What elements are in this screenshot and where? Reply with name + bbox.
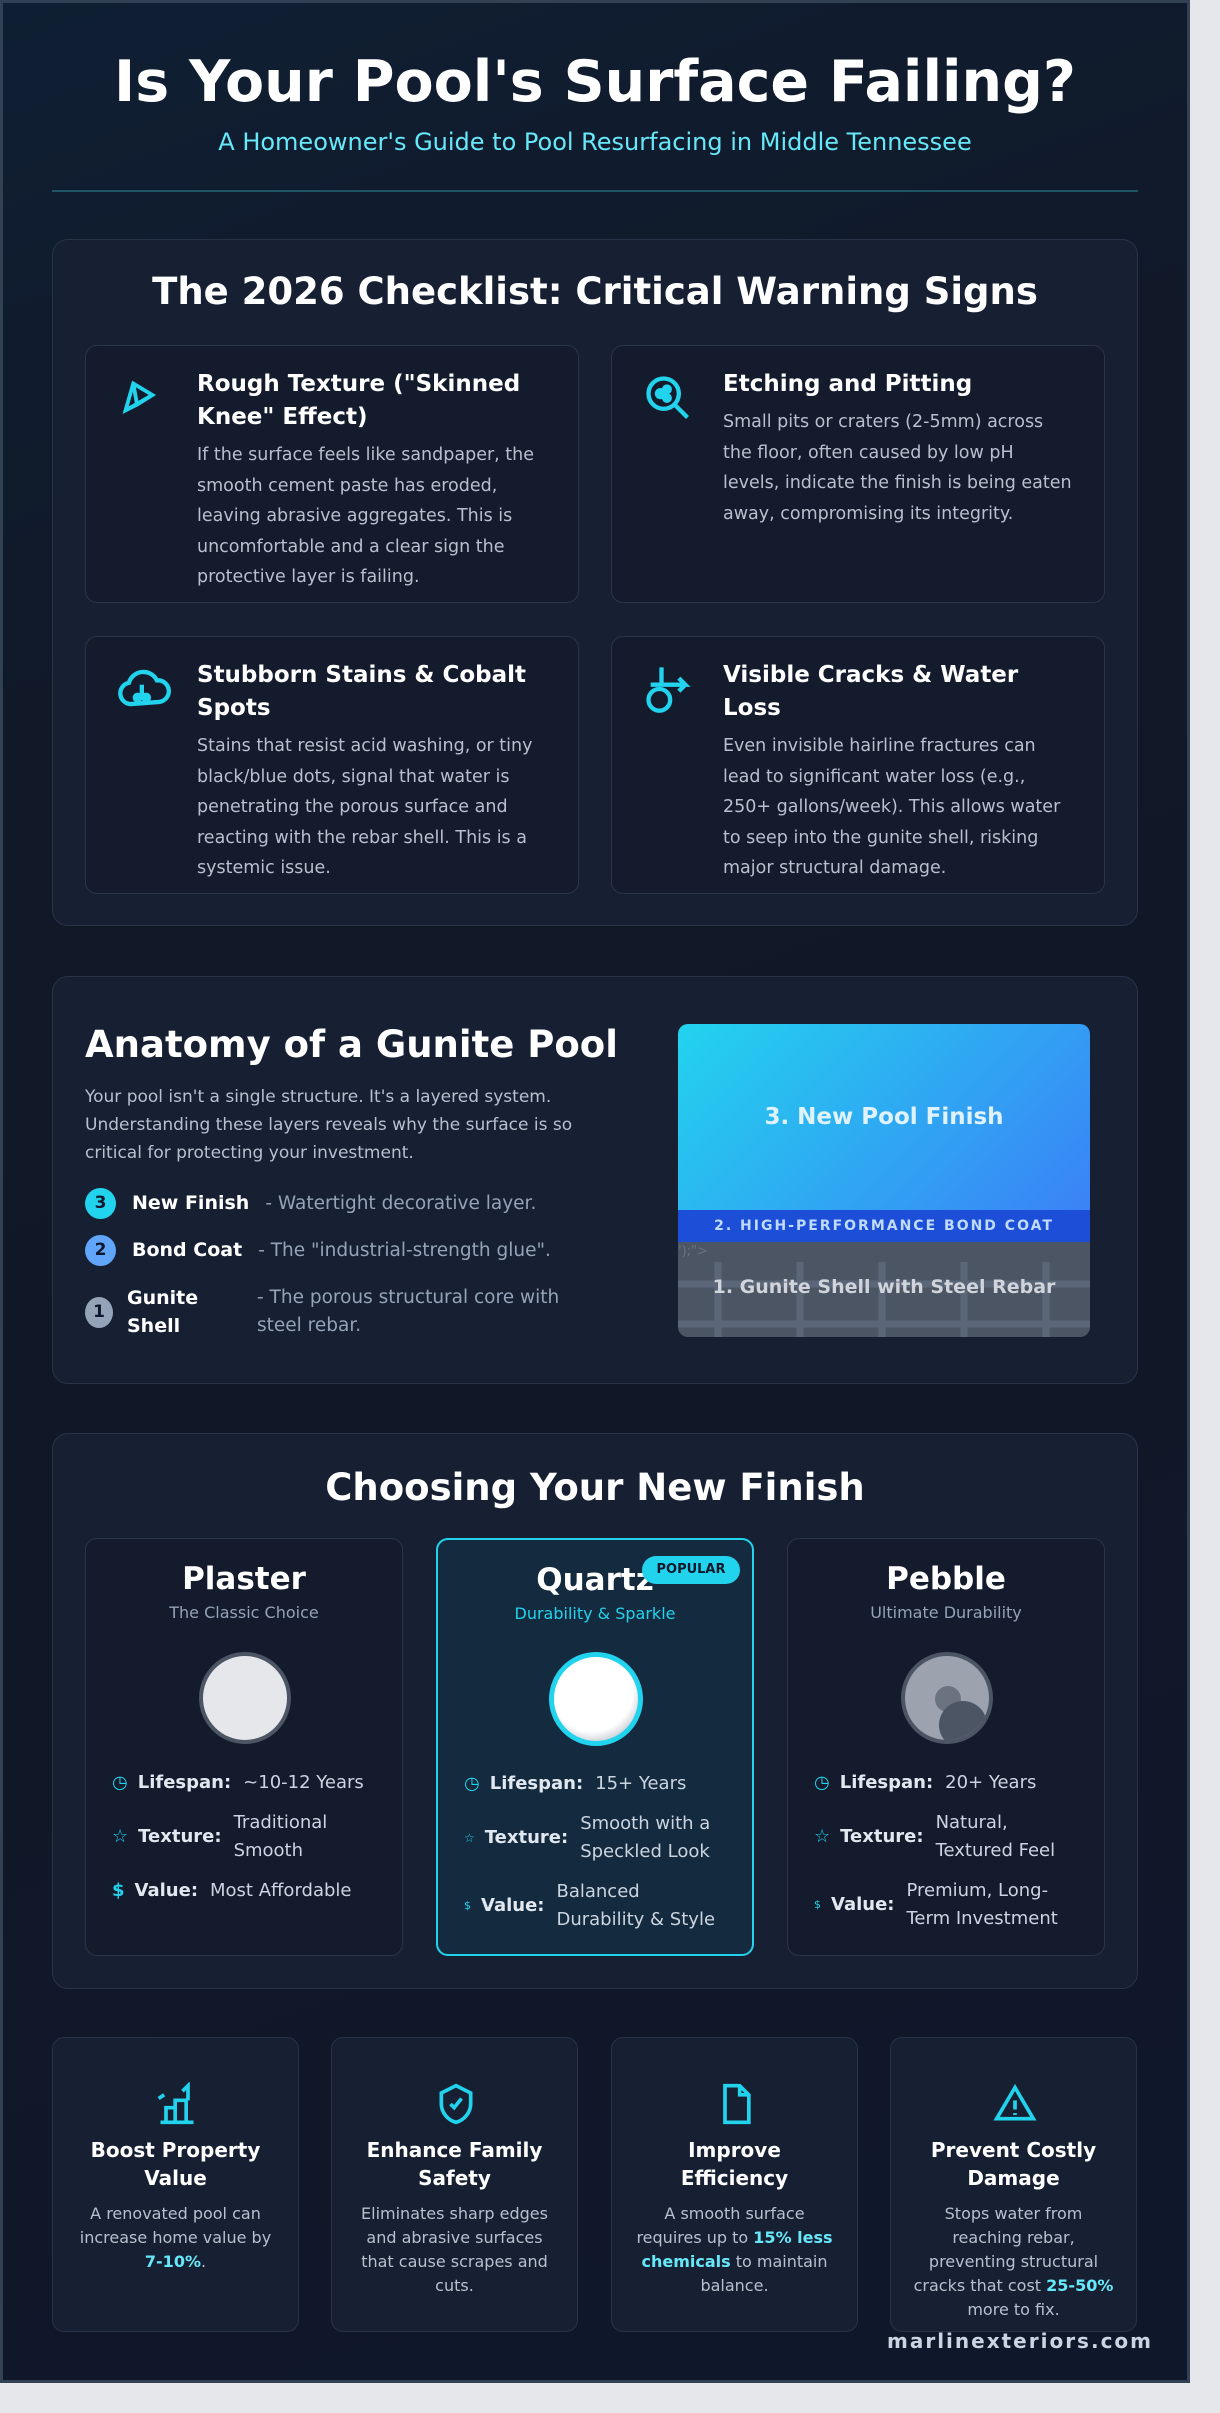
icon: crack <box>646 667 690 713</box>
card: stains: Stains that resist acid washing, or tiny black/blue dots, signal that water is penetrating the porous surface and reacting with the rebar shell. This is a systemic issue. <box>197 736 532 878</box>
swatch: quartz <box>549 1652 643 1746</box>
layer: new finish <box>678 1024 1090 1210</box>
benefit: prevent damage: Stops water from reaching rebar, preventing structural cracks that cost 25-50% more to fix. <box>914 2204 1113 2319</box>
panel: choosing finish <box>52 1433 1138 1989</box>
card: quartz: Texture: <box>485 1827 568 1848</box>
card: stains: Stubborn Stains & Cobalt Spots <box>197 662 526 721</box>
card: pebble: 20+ Years <box>945 1772 1036 1793</box>
card: plaster: Lifespan: <box>138 1772 231 1793</box>
card: cracks: Even invisible hairline fractures can lead to significant water loss (e.g., 250+ gallons/week). This allows water to seep into the gunite shell, risking major structural damage. <box>723 736 1060 878</box>
card: plaster: ~10-12 Years <box>243 1772 364 1793</box>
badge: popular: POPULAR <box>656 1562 726 1577</box>
layer: new finish: 3. New Pool Finish <box>764 1104 1004 1130</box>
card: quartz: Smooth with a Speckled Look <box>580 1813 710 1862</box>
card: pebble: ☆ <box>814 1826 830 1847</box>
card: pebble: Ultimate Durability <box>870 1603 1022 1622</box>
layer: gunite shell <box>678 1242 1090 1337</box>
card: pebble: $ <box>814 1898 821 1911</box>
swatch: plaster <box>199 1652 291 1744</box>
layer: bond coat: 2. HIGH-PERFORMANCE BOND COAT <box>714 1218 1054 1234</box>
badge: popular <box>642 1556 740 1584</box>
card: rough texture: If the surface feels like sandpaper, the smooth cement paste has eroded, leaving abrasive aggregates. This is uncomfortable and a clear sign the protective layer is failing. <box>197 445 534 587</box>
layer: gunite shell: ');"> <box>678 1244 708 1259</box>
benefit: efficiency <box>611 2037 858 2332</box>
card: pebble: Texture: <box>840 1826 924 1847</box>
item 2: Bond Coat <box>132 1239 242 1261</box>
item 3: 3 <box>95 1193 106 1213</box>
card: pebble: Lifespan: <box>840 1772 933 1793</box>
icon: magnifier <box>646 376 689 419</box>
card: cracks: Visible Cracks & Water Loss <box>723 662 1018 721</box>
layer: bond coat <box>678 1210 1090 1242</box>
panel: warning signs checklist <box>52 239 1138 926</box>
benefit: property value: Boost Property Value <box>91 2138 260 2190</box>
checklist heading: The 2026 Checklist: Critical Warning Signs <box>152 270 1038 313</box>
benefit: property value: A renovated pool can increase home value by 7-10%. <box>80 2204 271 2271</box>
panel: anatomy <box>52 976 1138 1384</box>
card: stains <box>85 636 579 894</box>
benefit: efficiency: A smooth surface requires up to 15% less chemicals to maintain balance. <box>636 2204 833 2295</box>
finish heading: Choosing Your New Finish <box>325 1466 865 1509</box>
card: plaster: ◷ <box>112 1772 128 1793</box>
card: quartz: ◷ <box>464 1773 480 1794</box>
icon: cloud <box>118 670 171 706</box>
card: pebble <box>787 1538 1105 1956</box>
item 1: Gunite Shell <box>127 1287 198 1337</box>
card: plaster: Texture: <box>138 1826 222 1847</box>
card: plaster: ☆ <box>112 1826 128 1847</box>
anatomy heading: Anatomy of a Gunite Pool <box>85 1023 618 1066</box>
diagram: pool layers <box>678 1024 1090 1337</box>
item 1: - The porous structural core with steel rebar. <box>257 1287 559 1336</box>
benefit: property value <box>52 2037 299 2332</box>
card: pebble: ◷ <box>814 1772 830 1793</box>
title: Is Your Pool's Surface Failing? <box>114 49 1076 115</box>
icon: building <box>158 2082 194 2124</box>
card: plaster: $ <box>112 1880 125 1901</box>
card: quartz <box>436 1538 754 1956</box>
card: cracks <box>611 636 1105 894</box>
card: pebble: Premium, Long-Term Investment <box>906 1880 1058 1929</box>
item 1: 1 <box>93 1302 105 1322</box>
subtitle: A Homeowner's Guide to Pool Resurfacing in Middle Tennessee <box>218 128 972 156</box>
benefit: prevent damage <box>890 2037 1137 2332</box>
card: pebble: Value: <box>831 1894 894 1915</box>
icon: document <box>723 2084 751 2124</box>
benefit: prevent damage: Prevent Costly Damage <box>931 2138 1096 2190</box>
card: quartz: Lifespan: <box>490 1773 583 1794</box>
benefit: efficiency: Improve Efficiency <box>681 2138 788 2190</box>
item 2: - The "industrial-strength glue". <box>258 1240 551 1260</box>
benefit: safety: Enhance Family Safety <box>367 2138 542 2190</box>
card: quartz: Value: <box>481 1895 544 1916</box>
layer list <box>85 1188 559 1337</box>
card: rough texture <box>85 345 579 603</box>
item 2: 2 <box>95 1240 106 1260</box>
card: plaster: Plaster <box>182 1561 306 1597</box>
card: plaster: The Classic Choice <box>169 1603 319 1622</box>
card: pebble: Pebble <box>886 1561 1006 1597</box>
card: plaster: Traditional Smooth <box>234 1812 327 1861</box>
card: pebble: Natural, Textured Feel <box>936 1812 1055 1861</box>
icon: warning <box>994 2084 1036 2120</box>
card: plaster: Most Affordable <box>210 1880 351 1901</box>
icon: rough <box>122 380 156 414</box>
card: quartz: ☆ <box>464 1831 475 1845</box>
card: etching: Etching and Pitting <box>723 371 972 397</box>
card: quartz: $ <box>464 1899 471 1912</box>
item 3 <box>85 1188 536 1219</box>
card: etching <box>611 345 1105 603</box>
card: plaster: Value: <box>135 1880 198 1901</box>
swatch: pebble <box>901 1652 993 1744</box>
benefit: safety <box>331 2037 578 2332</box>
icon: shield <box>440 2084 472 2124</box>
card: quartz: Durability & Sparkle <box>514 1604 675 1623</box>
benefit: safety: Eliminates sharp edges and abrasive surfaces that cause scrapes and cuts. <box>361 2204 548 2295</box>
card: plaster <box>85 1538 403 1956</box>
card: etching: Small pits or craters (2-5mm) across the floor, often caused by low pH levels, indicate the finish is being eaten away, compromising its integrity. <box>723 412 1072 524</box>
card: quartz: Balanced Durability & Style <box>556 1881 715 1930</box>
item 3: New Finish <box>132 1192 249 1214</box>
card: rough texture: Rough Texture ("Skinned Knee" Effect) <box>197 371 520 430</box>
card: quartz: 15+ Years <box>595 1773 686 1794</box>
layer: gunite shell: 1. Gunite Shell with Steel Rebar <box>713 1276 1055 1298</box>
item 3: - Watertight decorative layer. <box>265 1192 536 1214</box>
item 1 <box>85 1287 559 1337</box>
card: quartz: Quartz <box>536 1562 654 1598</box>
anatomy intro text: Your pool isn't a single structure. It's a layered system. Understanding these layers reveals why the surface is so critical for protecting your investment. <box>85 1087 572 1163</box>
item 2 <box>85 1235 551 1266</box>
footer: website: marlinexteriors.com <box>887 2329 1153 2353</box>
